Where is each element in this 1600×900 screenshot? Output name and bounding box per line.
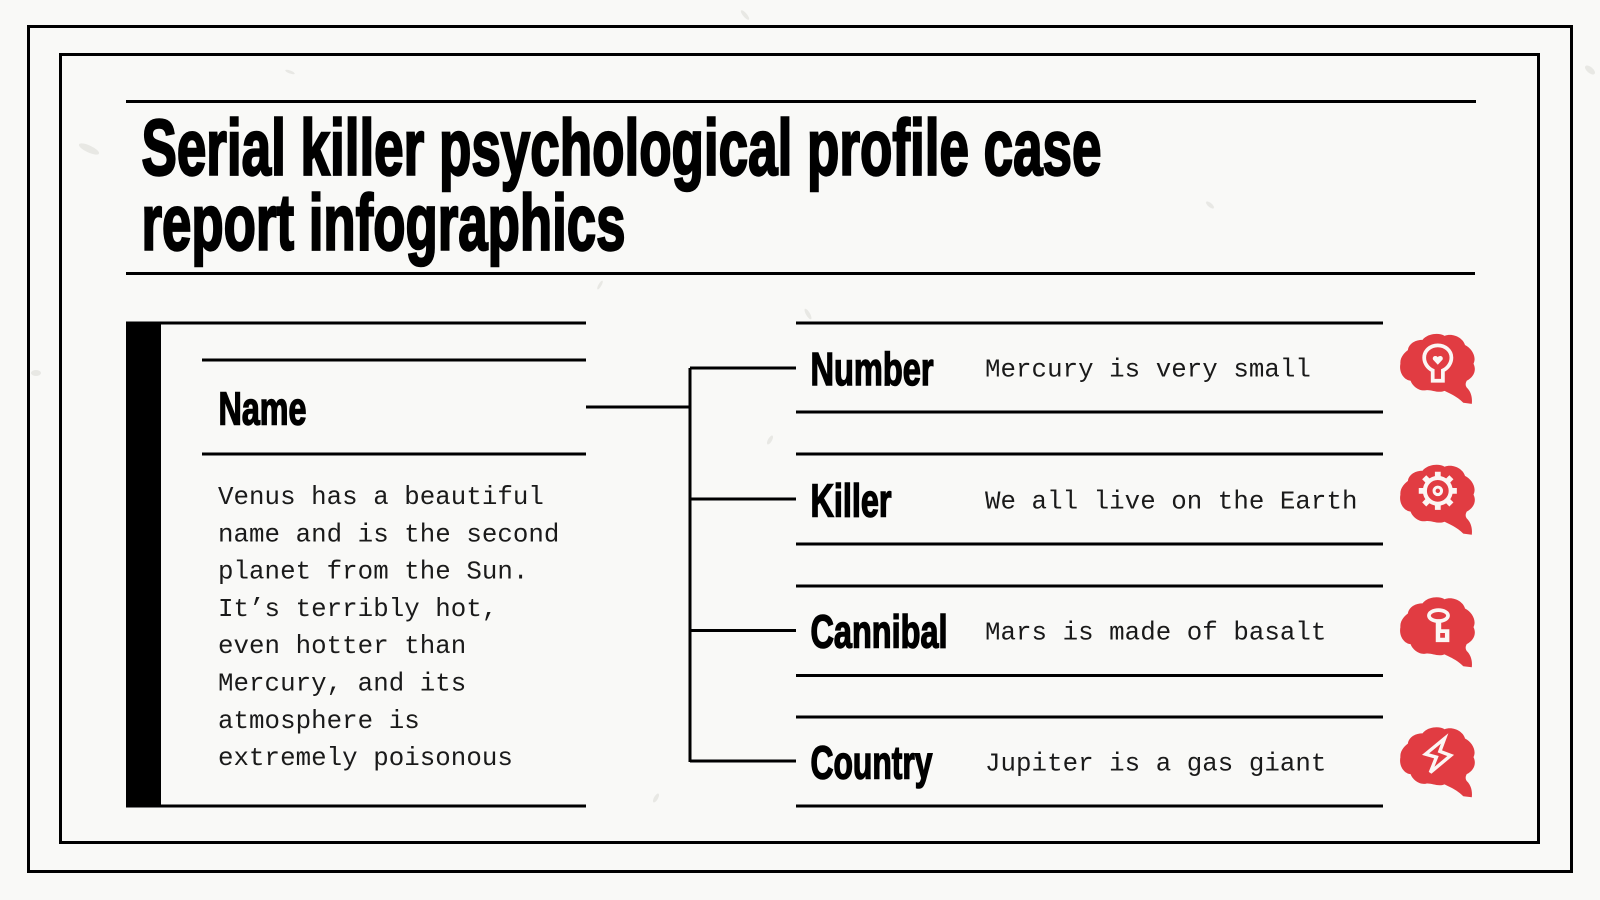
row: Number: Mercury is very small [985,356,1311,384]
title [126,102,1476,274]
text block: Venus description: extremely poisonous [218,744,513,773]
row: Country [796,717,1383,806]
text block: Venus description: planet from the Sun. [218,558,528,587]
title: report infographics [142,178,626,266]
icon: brain with light bulb [1400,334,1475,404]
icon: brain with key [1400,597,1475,667]
heading: name: Name [218,382,306,434]
panel: name profile [126,322,586,807]
row: Country: Country [810,736,933,788]
row: Cannibal: Cannibal [810,606,948,658]
connector tree [586,368,796,762]
row: Number: Number [810,343,934,395]
text block: Venus description: name and is the second [218,520,559,549]
row: Cannibal [796,586,1383,676]
row: Cannibal: Mars is made of basalt [985,618,1326,648]
text block: Venus description: Venus has a beautiful [218,483,544,512]
text block: Venus description: Mercury, and its [218,670,466,698]
row: Country: Jupiter is a gas giant [985,750,1326,778]
black side bar [126,322,161,807]
icon: brain with gear [1400,465,1475,535]
row: Killer: Killer [810,474,892,526]
icon: brain with lightning bolt [1400,727,1475,797]
row: Number [796,323,1383,412]
text block: Venus description: even hotter than [218,632,466,661]
title: Serial killer psychological profile case [142,102,1102,192]
text block: Venus description: It’s terribly hot, [218,595,497,624]
row: Killer: We all live on the Earth [985,488,1358,516]
row: Killer [796,454,1383,544]
text block: Venus description: atmosphere is [218,707,420,736]
